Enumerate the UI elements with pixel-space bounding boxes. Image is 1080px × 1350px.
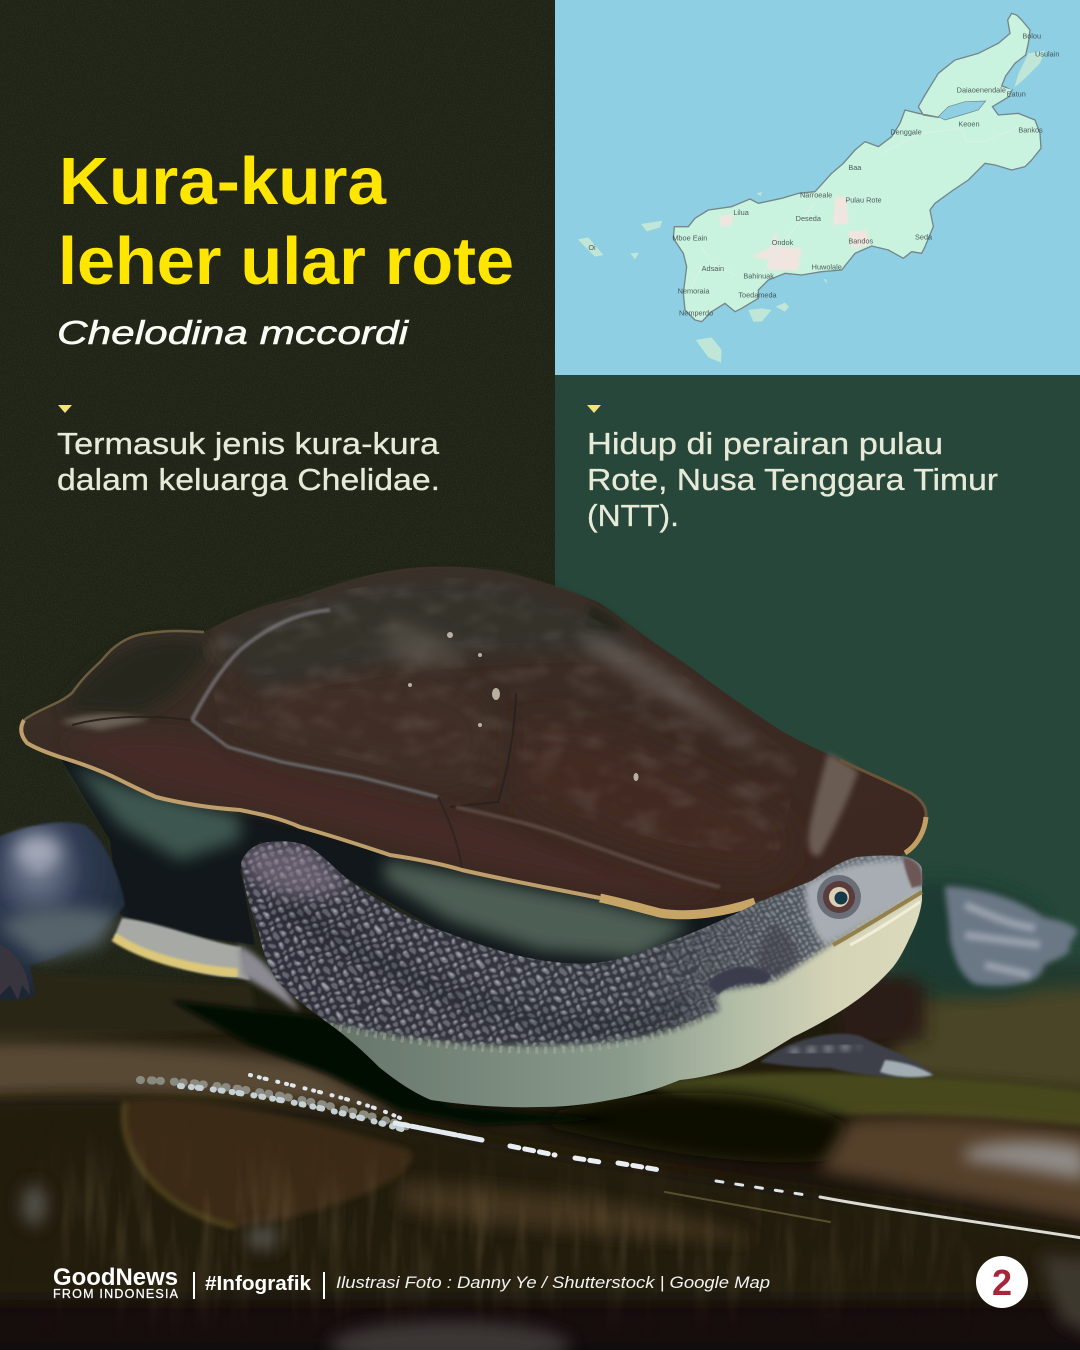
belly and throat bbox=[324, 889, 922, 1108]
pale shell band bbox=[809, 753, 858, 856]
log: light brown top left bbox=[0, 1042, 410, 1120]
inlet bbox=[1003, 74, 1021, 90]
eye bbox=[817, 875, 861, 919]
fact: habitat: Rote, Nusa Tenggara Timur bbox=[587, 462, 998, 497]
place labels: Mboe Eain bbox=[672, 234, 707, 243]
jaw patch bbox=[707, 966, 770, 995]
left rear leg bbox=[0, 822, 125, 1000]
coarse neck scales bbox=[241, 841, 762, 1072]
lagoon bbox=[938, 101, 986, 120]
teal plastron near the rear bbox=[72, 765, 240, 860]
lower shell rim bbox=[114, 918, 300, 1012]
neck and head bbox=[241, 841, 924, 1108]
dark shadow scales bbox=[280, 900, 690, 1026]
photo background: murky water and log bbox=[0, 960, 1080, 1350]
brown band bbox=[400, 1180, 760, 1240]
place labels: Daiaoenendale bbox=[957, 86, 1006, 95]
title: Kura-kura bbox=[59, 144, 387, 219]
fact: family: dalam keluarga Chelidae. bbox=[57, 462, 440, 497]
far hind foot bbox=[899, 880, 1078, 993]
place labels: Bahinuak bbox=[743, 271, 774, 280]
fact: habitat bbox=[587, 426, 998, 533]
background: right green panel bbox=[555, 375, 1080, 1015]
water glitter and glints on the log bbox=[140, 1075, 1080, 1238]
small rear foot bbox=[760, 1034, 935, 1077]
place labels: Baa bbox=[848, 163, 862, 172]
page number badge bbox=[976, 1256, 1028, 1308]
grey highlights bbox=[580, 630, 770, 760]
place labels: Oi bbox=[588, 243, 596, 252]
deep shadow on log bbox=[540, 1093, 850, 1163]
footer divider bbox=[323, 1272, 325, 1299]
black crevice under belly bbox=[170, 1000, 620, 1125]
place labels: Huwolale bbox=[812, 262, 842, 271]
place labels: Bankos bbox=[1018, 126, 1043, 135]
place labels: Eatun bbox=[1007, 90, 1026, 99]
shell mottling bbox=[200, 578, 800, 852]
place labels: Nemoraia bbox=[678, 286, 710, 295]
grey blurred spots in water bbox=[22, 1185, 570, 1350]
dark olive ground on left bbox=[0, 970, 260, 1040]
page number badge: 2 bbox=[992, 1262, 1012, 1303]
footer logo: GoodNews bbox=[53, 1264, 178, 1291]
urban patches bbox=[720, 197, 870, 270]
marker: right fact bbox=[587, 405, 601, 413]
place labels: Ondok bbox=[772, 238, 794, 247]
place labels: Lilua bbox=[733, 208, 750, 217]
map of Rote island bbox=[555, 0, 1080, 375]
turtle bbox=[0, 567, 1078, 1125]
footer logo: FROM INDONESIA bbox=[53, 1287, 179, 1301]
head highlight bbox=[805, 861, 920, 945]
pale flecks bbox=[408, 632, 638, 781]
pink top of neck bbox=[240, 845, 350, 900]
teal plastron near the neck bbox=[385, 860, 690, 958]
place labels: Nemperdo bbox=[679, 309, 713, 318]
fact: habitat: (NTT). bbox=[587, 498, 679, 533]
hashtag: #Infografik bbox=[205, 1273, 312, 1295]
place labels: Toedameda bbox=[738, 291, 778, 300]
place labels: Bandos bbox=[848, 236, 874, 245]
small islands bbox=[578, 51, 1045, 363]
seam lines bbox=[72, 610, 720, 887]
place labels: Denggale bbox=[890, 127, 922, 136]
brown lit wood bbox=[820, 1118, 1080, 1225]
carapace bbox=[21, 567, 926, 915]
fine head scales bbox=[642, 856, 922, 1025]
background: left olive panel bbox=[0, 0, 555, 1010]
dark upper shell bbox=[215, 578, 640, 690]
place labels: Narroeale bbox=[800, 190, 832, 199]
reddish lower scutes bbox=[60, 734, 720, 895]
soft green transition on right bbox=[900, 960, 1080, 1010]
left flap shade bbox=[60, 638, 210, 715]
title bbox=[58, 144, 514, 299]
fact: family bbox=[57, 426, 440, 497]
roads bbox=[688, 127, 1018, 293]
photo credit: Ilustrasi Foto : Danny Ye / Shutterstock | Google Map bbox=[336, 1273, 770, 1292]
place labels: Seda bbox=[915, 232, 933, 241]
place labels: Usulain bbox=[1035, 50, 1059, 59]
place labels: Adsain bbox=[702, 264, 724, 273]
place labels bbox=[588, 32, 1059, 318]
species name: Chelodina mccordi bbox=[57, 314, 410, 351]
mouth line bbox=[833, 892, 922, 945]
place labels: Keoen bbox=[958, 120, 980, 129]
dark under-shell bbox=[60, 757, 755, 975]
fact: family: Termasuk jenis kura-kura bbox=[57, 426, 440, 461]
footer divider bbox=[193, 1272, 195, 1299]
place labels: Bolou bbox=[1022, 32, 1041, 41]
murky olive water on right bbox=[880, 985, 1080, 1095]
place labels: Pulau Rote bbox=[845, 195, 882, 204]
log: dark shaft bbox=[0, 1097, 1080, 1300]
silver sheen on wood bbox=[965, 1142, 1080, 1180]
wood streak texture bbox=[62, 1157, 936, 1307]
place labels: Deseda bbox=[796, 214, 822, 223]
title: leher ular rote bbox=[58, 224, 514, 299]
marker: left fact bbox=[58, 405, 72, 413]
golden rim bbox=[21, 720, 600, 898]
moss band bbox=[640, 1073, 1080, 1130]
lens reflection bbox=[124, 1099, 413, 1227]
nose bbox=[903, 857, 922, 888]
island shape bbox=[673, 13, 1041, 322]
fact: habitat: Hidup di perairan pulau bbox=[587, 426, 943, 461]
